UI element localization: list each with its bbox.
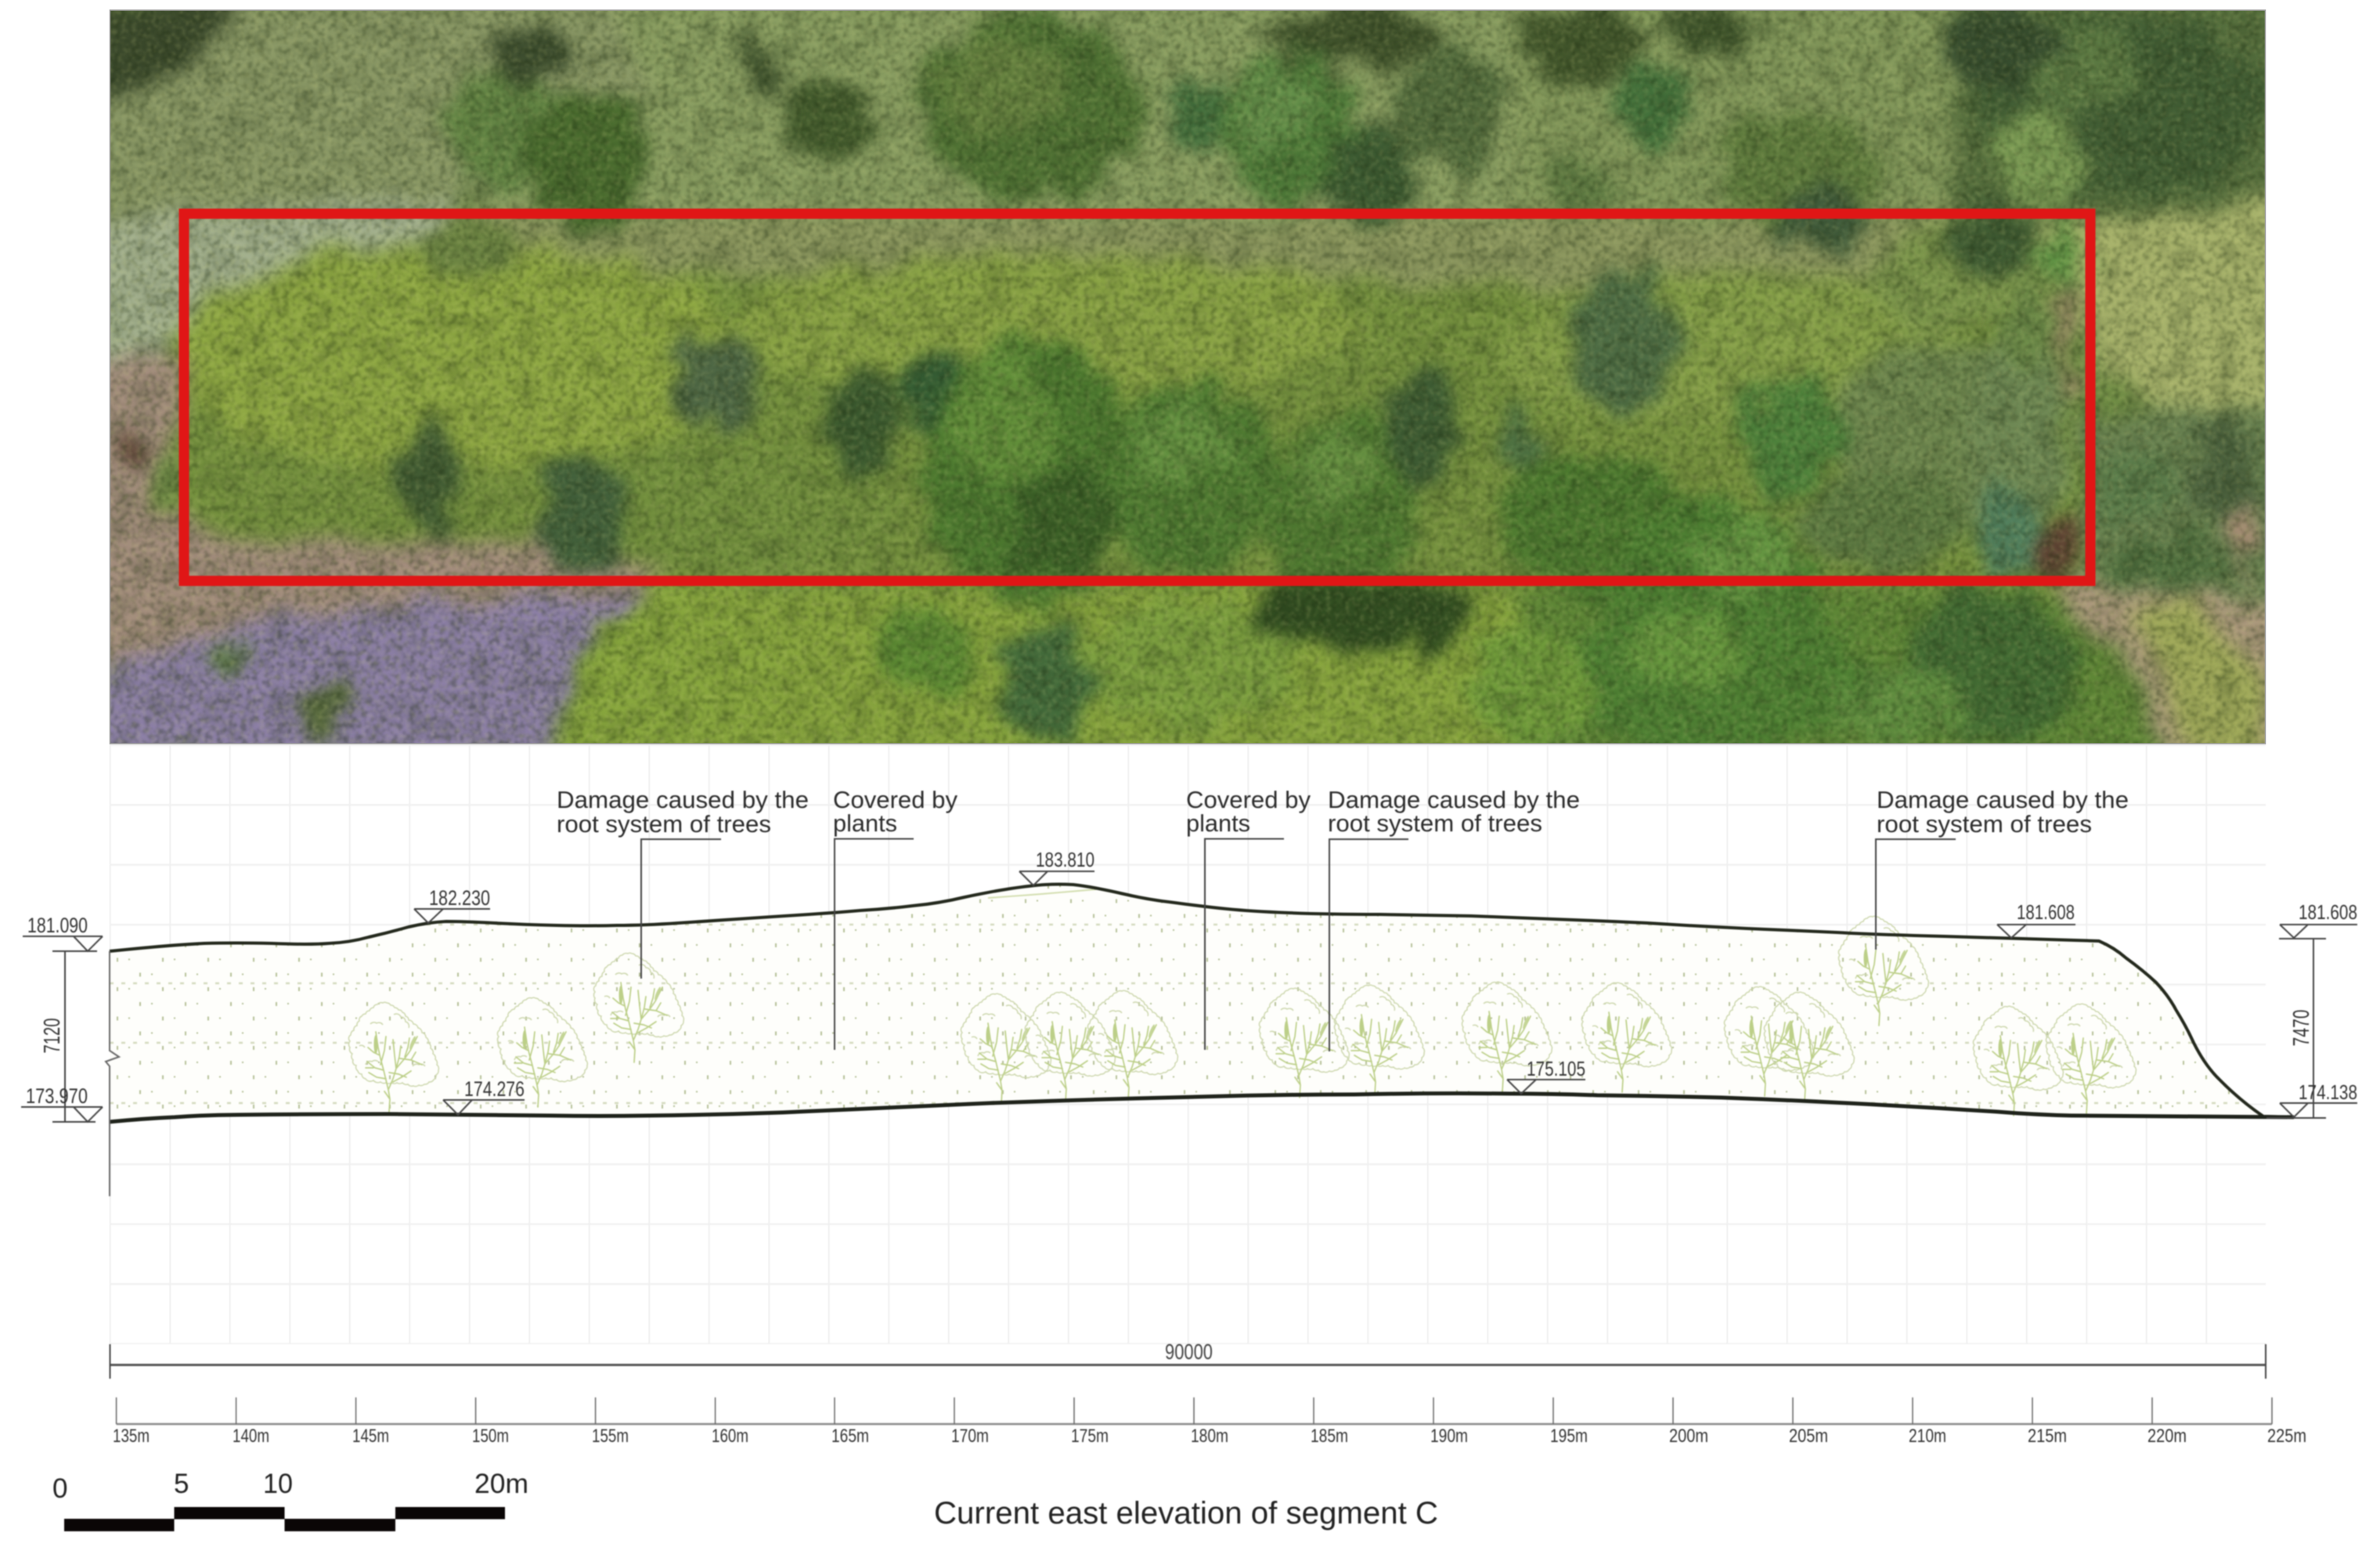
dimension 7120: 7120: [40, 1018, 65, 1054]
distance axis: 155m: [592, 1426, 629, 1447]
elevation marker 174.276: [443, 1077, 525, 1115]
distance axis: 210m: [1909, 1426, 1946, 1447]
distance axis: 185m: [1311, 1426, 1348, 1447]
elevation marker 174.138: 174.138: [2299, 1080, 2357, 1104]
elevation marker 173.970: 173.970: [26, 1084, 88, 1108]
elevation marker 182.230: [414, 886, 490, 923]
elevation marker 181.608 on slope: 181.608: [2017, 900, 2075, 924]
terrain bottom profile: [110, 1094, 2294, 1122]
distance axis: 225m: [2267, 1426, 2306, 1447]
elevation marker 175.105: 175.105: [1527, 1057, 1585, 1080]
dimension line 90000: [110, 1339, 2266, 1379]
elevation marker 174.276: 174.276: [464, 1077, 525, 1101]
elevation marker 183.810: 183.810: [1036, 848, 1094, 871]
scale bar: 20m: [474, 1469, 528, 1499]
distance axis: 135m: [113, 1426, 150, 1447]
panel: aerial photo of the slope: [91, 0, 2292, 759]
distance axis: 205m: [1789, 1426, 1828, 1447]
callout: covered by plants, left: Covered by: [833, 786, 957, 813]
callout: covered by plants, centre: Covered by: [1186, 786, 1311, 813]
distance axis: 180m: [1191, 1426, 1228, 1447]
foliage texture: [110, 10, 2266, 745]
scale bar: 10: [263, 1469, 293, 1499]
elevation marker 175.105: [1507, 1057, 1585, 1094]
elevation marker 181.090: 181.090: [27, 914, 88, 937]
distance axis: 215m: [2028, 1426, 2067, 1447]
left section edge with break mark: [106, 951, 119, 1196]
callout: damage by tree roots, left: [557, 786, 809, 979]
elevation marker 181.608 at right edge: 181.608: [2299, 900, 2357, 924]
callout: covered by plants, centre: [1186, 786, 1311, 1050]
terrain top profile: [110, 885, 2294, 1117]
background grid: [110, 745, 2266, 1344]
callout: damage by tree roots, right: [1876, 786, 2129, 950]
elevation marker 174.138: [2266, 1080, 2357, 1118]
callout: damage by tree roots, centre: root system of trees: [1328, 809, 1542, 837]
elevation marker 181.608 on slope: [1997, 900, 2075, 938]
distance axis: 175m: [1071, 1426, 1109, 1447]
distance axis: 200m: [1669, 1426, 1708, 1447]
distance axis: 165m: [831, 1426, 869, 1447]
distance axis: 195m: [1550, 1426, 1588, 1447]
distance axis: 160m: [712, 1426, 748, 1447]
callout: damage by tree roots, right: Damage caused by the: [1877, 786, 2129, 813]
distance axis: 220m: [2147, 1426, 2187, 1447]
elevation marker 181.090: [23, 914, 103, 951]
callout: covered by plants, left: plants: [833, 809, 897, 837]
scale bar: 0: [52, 1473, 67, 1504]
trees in the photo: [115, 0, 2265, 755]
callout: damage by tree roots, left: root system of trees: [557, 810, 771, 838]
dimension line 90000: 90000: [1165, 1339, 1213, 1364]
panel: elevation drawing: [21, 745, 2357, 1531]
trees in section: [348, 916, 2136, 1116]
callout: covered by plants, centre: plants: [1186, 809, 1250, 837]
distance axis: 170m: [951, 1426, 989, 1447]
distance axis: 140m: [233, 1426, 269, 1447]
callout: damage by tree roots, right: root system of trees: [1877, 810, 2092, 838]
distance axis: 150m: [472, 1426, 509, 1447]
elevation marker 182.230: 182.230: [429, 886, 490, 910]
scale bar: 5: [174, 1469, 189, 1499]
dimension 7470: 7470: [2289, 1010, 2314, 1046]
soil section hatch: [110, 877, 2270, 1127]
elevation marker 183.810: [1019, 848, 1094, 885]
distance axis: 190m: [1430, 1426, 1468, 1447]
callout: damage by tree roots, centre: [1328, 786, 1580, 1051]
red highlight rectangle: [184, 214, 2090, 581]
distance axis: 145m: [352, 1426, 389, 1447]
elevation marker 181.608 at right edge: [2279, 900, 2357, 939]
callout: damage by tree roots, left: Damage caused by the: [557, 786, 809, 813]
scale bar: [52, 1469, 528, 1531]
title: Current east elevation of segment C: [934, 1496, 1438, 1531]
photo border: [110, 10, 2266, 744]
elevation marker 173.970: [21, 1084, 103, 1122]
callout: covered by plants, left: [833, 786, 957, 1050]
callout: damage by tree roots, centre: Damage caused by the: [1328, 786, 1580, 813]
distance axis: [113, 1397, 2306, 1447]
